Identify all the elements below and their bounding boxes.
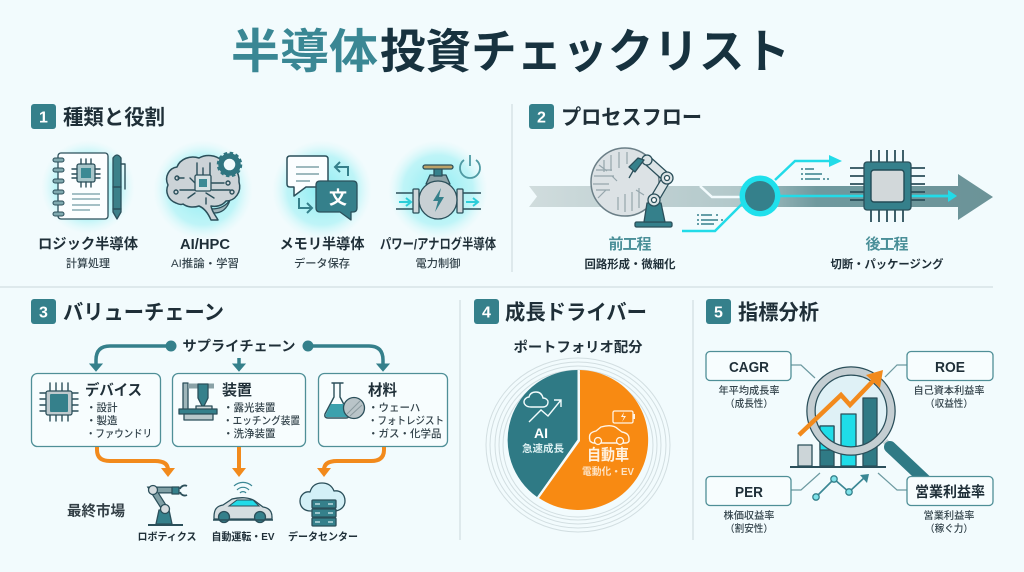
pie chart: portfolio: 電動化・EV bbox=[582, 465, 634, 478]
icon: power valve bbox=[388, 140, 488, 240]
label: front-end process: 前工程 bbox=[608, 235, 652, 253]
label: memory semiconductor: メモリ半導体 bbox=[280, 235, 365, 253]
box: materials bbox=[318, 374, 448, 446]
label: AI/HPC: AI推論・学習 bbox=[171, 256, 239, 270]
pie chart: portfolio: 自動車 bbox=[587, 446, 629, 464]
metric: operating margin: 営業利益率 bbox=[924, 509, 974, 522]
icon: memory speech bubbles: 文 bbox=[329, 188, 347, 208]
metric: PER: （割安性） bbox=[725, 522, 773, 535]
icon: packaged chip bbox=[850, 150, 957, 222]
box: device: デバイス bbox=[85, 381, 142, 399]
metric: operating margin bbox=[907, 476, 993, 535]
label: AI/HPC: AI/HPC bbox=[180, 236, 230, 253]
label: back-end process bbox=[830, 235, 944, 271]
label: front-end process: 回路形成・微細化 bbox=[584, 257, 676, 271]
box: equipment bbox=[172, 374, 306, 446]
box: equipment: 装置 bbox=[222, 382, 252, 399]
mini line chart icon bbox=[813, 474, 869, 500]
label: back-end process: 切断・パッケージング bbox=[830, 257, 944, 271]
label: front-end process bbox=[584, 235, 676, 271]
metric: ROE bbox=[907, 352, 993, 410]
metric: PER: 株価収益率 bbox=[724, 509, 774, 522]
icon: robotics bbox=[148, 485, 187, 525]
title: 半導体 bbox=[231, 25, 378, 78]
label: back-end process: 後工程 bbox=[866, 235, 908, 253]
label: AI/HPC bbox=[171, 236, 239, 270]
pie chart: portfolio: AI bbox=[534, 425, 548, 441]
heading: 4: 成長ドライバー bbox=[505, 300, 647, 324]
icon: autonomous car bbox=[213, 482, 273, 522]
heading: 5 bbox=[706, 299, 819, 324]
label: memory semiconductor bbox=[280, 235, 365, 270]
connectors bbox=[791, 365, 907, 490]
label: memory semiconductor: データ保存 bbox=[294, 256, 350, 270]
label: data center: データセンター bbox=[288, 530, 358, 543]
icon: notebook with chip and pen bbox=[41, 140, 135, 234]
heading: 2: 2 bbox=[537, 110, 546, 126]
metric: PER: PER bbox=[735, 485, 763, 501]
supply chain connector: サプライチェーン bbox=[182, 338, 296, 354]
heading: 3: バリューチェーン bbox=[63, 302, 224, 324]
heading: 5: 指標分析 bbox=[738, 302, 819, 324]
metric: CAGR: 年平均成長率 bbox=[718, 384, 780, 397]
metric: CAGR: CAGR bbox=[729, 360, 769, 376]
metric: ROE: （収益性） bbox=[925, 397, 973, 410]
metric: PER bbox=[706, 476, 791, 535]
heading: 1: 1 bbox=[39, 110, 48, 126]
label: power/analog semiconductor: パワー/アナログ半導体 bbox=[380, 236, 496, 252]
panel: 1 types and roles bbox=[31, 104, 496, 270]
metric: CAGR: （成長性） bbox=[725, 397, 773, 410]
title: 投資チェックリスト bbox=[380, 25, 790, 78]
arrow: process flow band bbox=[529, 174, 993, 220]
label: robotics: ロボティクス bbox=[138, 531, 196, 543]
label: power/analog semiconductor bbox=[380, 236, 496, 270]
box: equipment: ・エッチング装置 bbox=[223, 414, 300, 427]
magnifier chart bbox=[790, 370, 925, 480]
box: equipment: ・洗浄装置 bbox=[223, 427, 276, 440]
label: logic semiconductor: ロジック半導体 bbox=[38, 235, 138, 253]
heading: 3: 3 bbox=[39, 304, 48, 322]
box: materials: 材料 bbox=[368, 381, 397, 399]
panel: 2 process flow bbox=[529, 104, 993, 271]
metric: operating margin: （稼ぐ力） bbox=[925, 522, 973, 535]
arrows: orange to end markets bbox=[97, 447, 384, 477]
box: device bbox=[32, 374, 160, 446]
box: device: ・製造 bbox=[86, 414, 118, 427]
box: device: ・ファウンドリ bbox=[86, 428, 152, 440]
panel: 3 value chain bbox=[31, 299, 448, 543]
label: logic semiconductor: 計算処理 bbox=[66, 256, 110, 270]
supply chain connector bbox=[90, 338, 389, 371]
pie chart: portfolio: 急速成長 bbox=[522, 442, 564, 455]
metric: ROE: 自己資本利益率 bbox=[914, 384, 984, 397]
label: logic semiconductor bbox=[38, 235, 138, 270]
pie chart: portfolio bbox=[486, 358, 670, 532]
metric: ROE: ROE bbox=[935, 360, 965, 376]
heading: 1: 種類と役割 bbox=[63, 106, 165, 130]
panel: 5 metrics analysis bbox=[706, 299, 993, 535]
label: final market: 最終市場 bbox=[67, 502, 125, 520]
label: power/analog semiconductor: 電力制御 bbox=[416, 256, 460, 270]
circuit lines and node bbox=[682, 155, 955, 231]
subheading: portfolio allocation: ポートフォリオ配分 bbox=[514, 339, 642, 355]
metric: CAGR bbox=[706, 352, 791, 410]
label: autonomous driving / EV: 自動運転・EV bbox=[212, 530, 274, 543]
heading: 2: プロセスフロー bbox=[561, 106, 702, 130]
box: materials: ・フォトレジスト bbox=[368, 415, 444, 427]
box: materials: ・ガス・化学品 bbox=[368, 427, 442, 440]
heading: 5: 5 bbox=[714, 304, 723, 322]
icon: wafer and robot arm bbox=[591, 148, 673, 227]
box: device: ・設計 bbox=[86, 401, 118, 414]
icon: memory speech bubbles bbox=[272, 140, 372, 240]
metric: operating margin: 営業利益率 bbox=[915, 483, 985, 501]
box: materials: ・ウェーハ bbox=[368, 402, 420, 414]
heading: 1 bbox=[31, 104, 165, 130]
icon: data center cloud bbox=[300, 483, 345, 526]
panel: 4 growth drivers bbox=[474, 299, 670, 532]
box: equipment: ・露光装置 bbox=[223, 401, 276, 414]
heading: 4: 4 bbox=[482, 304, 491, 322]
icon: AI brain bbox=[153, 140, 253, 240]
